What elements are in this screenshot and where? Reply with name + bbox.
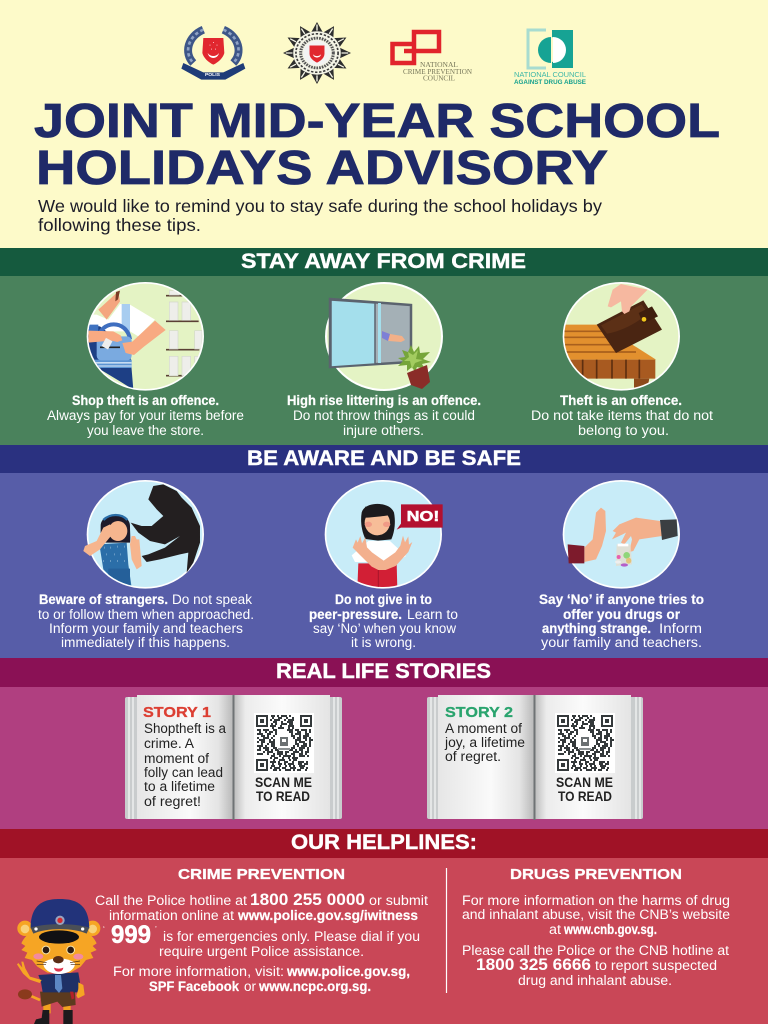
- text: crime prevention details: 999: [111, 921, 151, 949]
- text: drugs prevention details: and inhalant abuse, visit the CNB’s website: [462, 907, 730, 922]
- story 2 text: of regret.: [445, 749, 501, 764]
- story 1 text: crime. A: [144, 736, 194, 751]
- mascot: lion: [17, 899, 100, 1024]
- background: cream header: [0, 0, 768, 248]
- text: drugs prevention details: drug and inhalant abuse.: [518, 973, 672, 988]
- text: say no: your family and teachers.: [541, 635, 702, 650]
- subheading: drugs prevention: DRUGS PREVENTION: [510, 867, 682, 883]
- text: crime prevention details: www.police.gov.sg/iwitness: [237, 908, 418, 923]
- qr code 2: [555, 713, 615, 773]
- text: crime prevention details: www.ncpc.org.sg.: [258, 979, 371, 994]
- logo: police crest: [181, 30, 245, 80]
- story 1 text: Shoptheft is a: [144, 721, 226, 736]
- scan me 2: SCAN ME: [556, 774, 613, 790]
- text: crime prevention details: information online at: [109, 908, 234, 923]
- story 2 text: A moment of: [445, 721, 522, 736]
- logo: National Crime Prevention Council: CRIME PREVENTION: [403, 67, 473, 76]
- text: shop theft: Always pay for your items before: [47, 408, 244, 423]
- heading: stay away from crime: [0, 248, 768, 276]
- text: high rise littering: [287, 393, 481, 438]
- text: beware of strangers: Inform your family and teachers: [49, 621, 243, 636]
- text: crime prevention details: ’: [155, 925, 157, 934]
- icon: say no to drugs: [563, 480, 680, 589]
- icon: shop theft: [87, 282, 204, 391]
- text: crime prevention details: is for emergencies only. Please dial if you: [163, 929, 420, 944]
- story 1 text: [143, 704, 226, 809]
- text: shop theft: [47, 393, 244, 438]
- text: crime prevention details: For more information, visit:: [113, 964, 284, 979]
- text: drugs prevention details: [462, 893, 730, 988]
- text: beware of strangers: immediately if this happens.: [61, 635, 230, 650]
- book: story 1: [125, 695, 342, 820]
- text: shop theft: Shop theft is an offence.: [72, 393, 219, 408]
- text: crime prevention details: require urgent Police assistance.: [159, 944, 364, 959]
- logo: National Crime Prevention Council: COUNCIL: [423, 74, 455, 82]
- heading: our helplines: [0, 829, 768, 858]
- heading: be aware and be safe: BE AWARE AND BE SAFE: [247, 447, 521, 470]
- text: beware of strangers: Beware of strangers.: [39, 592, 168, 607]
- panel: be aware and be safe: [0, 445, 768, 658]
- text: high rise littering: injure others.: [343, 423, 424, 438]
- text: peer pressure: [309, 592, 458, 650]
- logo: National Crime Prevention Council: NATIONAL: [420, 60, 458, 69]
- text: say no: offer you drugs or: [563, 607, 681, 622]
- text: crime prevention details: or: [244, 979, 256, 994]
- scan me 2: [556, 774, 613, 804]
- icon: peer pressure: NO!: [407, 509, 439, 525]
- text: crime prevention details: ‘: [103, 925, 105, 934]
- text: crime prevention details: [95, 890, 428, 994]
- book: story 2: [427, 695, 643, 820]
- text: shop theft: you leave the store.: [87, 423, 204, 438]
- text: peer pressure: Learn to: [407, 607, 458, 622]
- text: drugs prevention details: 1800 325 6666: [476, 955, 591, 974]
- scan me 2: TO READ: [558, 788, 612, 804]
- scan me 1: SCAN ME: [255, 774, 312, 790]
- text: high rise littering: High rise littering is an offence.: [287, 393, 481, 408]
- text: theft: Do not take items that do not: [531, 408, 713, 423]
- text: peer pressure: peer-pressure.: [309, 607, 402, 622]
- title: JOINT MID-YEAR SCHOOL: [34, 95, 720, 148]
- text: peer pressure: Do not give in to: [335, 592, 432, 607]
- icon: high rise littering: [325, 282, 443, 391]
- logo: police star badge: [283, 22, 351, 84]
- intro text: We would like to remind you to stay safe during the school holidays by: [38, 196, 602, 216]
- title: [34, 95, 720, 195]
- text: theft: Theft is an offence.: [560, 393, 682, 408]
- text: drugs prevention details: www.cnb.gov.sg.: [563, 922, 657, 937]
- icon: theft wallet: [563, 282, 680, 391]
- text: say no: anything strange.: [542, 621, 651, 636]
- text: theft: [531, 393, 713, 438]
- text: peer pressure: it is wrong.: [351, 635, 416, 650]
- qr code 1: [254, 713, 314, 773]
- text: beware of strangers: Do not speak: [172, 592, 252, 607]
- scan me 1: [255, 774, 312, 804]
- text: theft: belong to you.: [578, 423, 669, 438]
- heading: our helplines: OUR HELPLINES:: [291, 831, 477, 854]
- intro text: [38, 196, 602, 235]
- logo: National Council Against Drug Abuse: NATIONAL COUNCIL: [514, 70, 586, 79]
- subheading: crime prevention: CRIME PREVENTION: [178, 867, 345, 883]
- heading: real life stories: REAL LIFE STORIES: [276, 660, 491, 683]
- text: crime prevention details: 1800 255 0000: [250, 890, 365, 909]
- icon: peer pressure: [325, 480, 443, 589]
- panel: real life stories: [0, 658, 768, 829]
- logo: National Council Against Drug Abuse: AGAINST DRUG ABUSE: [514, 79, 587, 86]
- text: beware of strangers: to or follow them when approached.: [38, 607, 254, 622]
- text: crime prevention details: SPF Facebook: [149, 979, 239, 994]
- text: crime prevention details: www.police.gov.sg,: [286, 964, 410, 979]
- scan me 1: TO READ: [256, 788, 310, 804]
- story 2 text: [444, 704, 525, 764]
- text: drugs prevention details: For more information on the harms of drug: [462, 893, 730, 908]
- logo: National Crime Prevention Council: [392, 32, 473, 82]
- text: crime prevention details: Call the Police hotline at: [95, 893, 247, 908]
- text: say no: Inform: [659, 621, 702, 636]
- heading: be aware and be safe: [0, 445, 768, 473]
- story 1 text: to a lifetime: [144, 779, 215, 794]
- intro text: following these tips.: [38, 215, 201, 235]
- story 1 text: folly can lead: [144, 765, 223, 780]
- story 1 text: moment of: [144, 751, 209, 766]
- text: say no: [539, 592, 704, 650]
- icon: beware of strangers: [83, 480, 204, 589]
- logo: National Council Against Drug Abuse: [514, 30, 587, 86]
- story 2 text: STORY 2: [445, 704, 513, 721]
- text: crime prevention details: or submit: [369, 893, 428, 908]
- text: drugs prevention details: to report suspected: [595, 958, 717, 973]
- title: HOLIDAYS ADVISORY: [36, 142, 608, 195]
- text: say no: Say ‘No’ if anyone tries to: [539, 592, 704, 607]
- text: drugs prevention details: at: [549, 922, 561, 937]
- logo: police crest: POLIS: [205, 72, 221, 78]
- panel: our helplines: [0, 829, 768, 1024]
- panel: stay away from crime: [0, 248, 768, 445]
- story 2 text: joy, a lifetime: [444, 735, 525, 750]
- text: drugs prevention details: Please call the Police or the CNB hotline at: [462, 943, 729, 958]
- heading: stay away from crime: STAY AWAY FROM CRIME: [241, 250, 526, 273]
- text: beware of strangers: [38, 592, 254, 650]
- divider: [446, 868, 448, 993]
- text: high rise littering: Do not throw things as it could: [293, 408, 475, 423]
- text: peer pressure: say ‘No’ when you know: [313, 621, 456, 636]
- heading: real life stories: [0, 658, 768, 687]
- story 1 text: of regret!: [144, 794, 201, 809]
- story 1 text: STORY 1: [143, 704, 211, 721]
